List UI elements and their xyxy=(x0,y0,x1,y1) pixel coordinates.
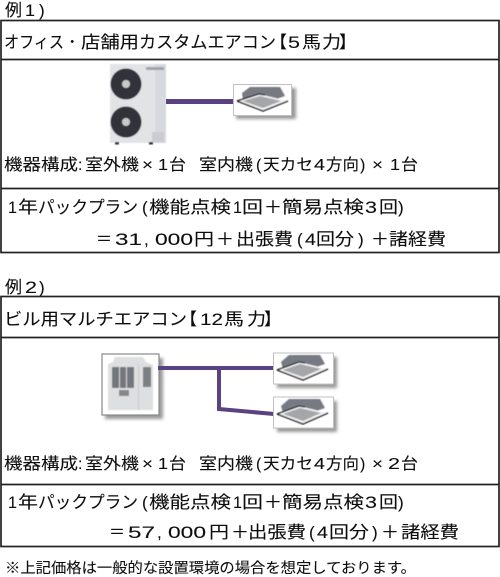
text: equipment configuration example 2: × xyxy=(142,456,153,473)
text: equipment configuration example 1: ) xyxy=(360,157,365,174)
text: equipment configuration example 2: 室外機 xyxy=(85,455,139,473)
text: price example 2: 57 xyxy=(128,523,155,542)
title: office and store custom air conditioner xyxy=(4,33,356,52)
text: equipment configuration example 2: : xyxy=(78,456,82,473)
icon: ceiling cassette indoor unit lower xyxy=(274,397,337,432)
text: price example 1 xyxy=(96,230,446,249)
title: office and store custom air conditioner: 店舗用 xyxy=(81,33,139,52)
text: equipment configuration example 2: 2 xyxy=(388,456,400,473)
text: equipment configuration example 1: 4 xyxy=(314,157,325,174)
text: equipment configuration example 2: 室内機 xyxy=(199,455,253,473)
text: one year pack plan example 2: ＋ xyxy=(264,493,282,512)
text: one year pack plan example 1: パックプラン xyxy=(38,198,138,217)
text: equipment configuration example 1: ( xyxy=(256,157,262,174)
text: one year pack plan example 1 xyxy=(8,198,404,217)
heading: example 2 xyxy=(5,278,45,297)
text: price example 1: 回分 xyxy=(316,230,354,249)
text: one year pack plan example 1: 簡易点検 xyxy=(282,198,364,217)
text: one year pack plan example 1: 3 xyxy=(365,198,377,217)
text: price example 1: 円 xyxy=(194,230,214,249)
title: office and store custom air conditioner: 】 xyxy=(339,33,356,52)
text: one year pack plan example 2: パックプラン xyxy=(38,493,138,512)
heading: example 2: ) xyxy=(39,278,45,297)
text: equipment configuration example 1: 室外機 xyxy=(85,156,139,174)
icon: ceiling cassette indoor unit upper xyxy=(274,353,337,388)
text: equipment configuration example 1: 天カセ xyxy=(263,157,313,174)
title: office and store custom air conditioner: 【 xyxy=(270,33,287,52)
title: office and store custom air conditioner: 5 xyxy=(288,33,300,52)
text: price example 1: ＝ xyxy=(96,230,112,249)
heading: example 1 xyxy=(5,1,45,20)
title: office and store custom air conditioner: 力 xyxy=(322,33,341,52)
text: price example 1: ＋ xyxy=(216,230,234,249)
text: equipment configuration example 2: 方向 xyxy=(326,455,359,473)
text: price example 1: 出張費 xyxy=(236,230,293,249)
text: equipment configuration example 2: 機器構成 xyxy=(4,455,78,473)
text: equipment configuration example 1: × xyxy=(142,157,153,174)
text: one year pack plan example 1: 機能点検 xyxy=(149,198,231,217)
text: equipment configuration example 2: ( xyxy=(256,456,262,473)
text: price example 2: ) xyxy=(372,523,378,542)
text: price example 2: 円 xyxy=(209,523,229,542)
title: building multi air conditioner: 12 xyxy=(200,310,223,329)
text: equipment configuration example 2 xyxy=(4,455,418,473)
text: equipment configuration example 1: 台 xyxy=(169,156,186,174)
text: price example 2 xyxy=(109,523,459,542)
text: one year pack plan example 1: ＋ xyxy=(264,198,282,217)
text: equipment configuration example 2: 天カセ xyxy=(263,456,313,473)
heading: example 2: 2 xyxy=(25,278,37,297)
title: building multi air conditioner: 馬 xyxy=(224,310,244,329)
text: one year pack plan example 2: 1 xyxy=(233,493,242,512)
text: equipment configuration example 2: 台 xyxy=(169,455,186,473)
title: office and store custom air conditioner: カスタムエアコン xyxy=(139,33,276,52)
text: price example 2: 回分 xyxy=(329,523,369,542)
text: price example 2: 出張費 xyxy=(248,523,306,542)
text: price example 2: 4 xyxy=(317,523,328,542)
text: price example 1: 4 xyxy=(305,230,316,249)
text: price example 2: , xyxy=(157,523,162,542)
text: price example 1: ＋ xyxy=(371,230,389,249)
text: equipment configuration example 1: 機器構成 xyxy=(4,156,78,174)
text: one year pack plan example 2: ) xyxy=(398,493,404,512)
icon: building multi outdoor unit xyxy=(102,354,163,419)
icon: ceiling cassette indoor unit xyxy=(234,84,296,119)
title: building multi air conditioner: 力 xyxy=(247,310,266,329)
text: equipment configuration example 2: × xyxy=(372,456,383,473)
text: price example 1: 000 xyxy=(155,230,193,249)
text: one year pack plan example 2: 年 xyxy=(18,493,38,512)
heading: example 1: 例 xyxy=(5,1,22,20)
title: office and store custom air conditioner: 馬 xyxy=(302,33,321,52)
text: price example 2: ( xyxy=(309,523,315,542)
text: equipment configuration example 1: 方向 xyxy=(326,156,359,174)
text: price example 1: 諸経費 xyxy=(389,230,446,249)
text: one year pack plan example 2: 回 xyxy=(379,493,398,512)
text: one year pack plan example 2: 1 xyxy=(8,493,17,512)
connector: branching refrigerant pipes xyxy=(158,368,274,414)
panel: example 1 table xyxy=(1,20,499,252)
title: office and store custom air conditioner: オフィス xyxy=(4,33,64,52)
text: one year pack plan example 1: 1 xyxy=(8,198,17,217)
text: one year pack plan example 2: 簡易点検 xyxy=(282,493,364,512)
text: price example 2: ＝ xyxy=(109,523,125,542)
text: price example 1: , xyxy=(144,230,149,249)
text: one year pack plan example 1: 回 xyxy=(379,198,398,217)
icon: outdoor unit with two fans xyxy=(110,64,166,144)
text: one year pack plan example 1: ) xyxy=(398,198,404,217)
text: price example 2: 000 xyxy=(168,523,206,542)
text: equipment configuration example 1: 1 xyxy=(158,157,168,174)
text: one year pack plan example 1: 回 xyxy=(242,198,263,217)
text: one year pack plan example 2: 3 xyxy=(365,493,377,512)
text: equipment configuration example 1: × xyxy=(372,157,383,174)
panel: example 2 table xyxy=(1,296,499,546)
text: equipment configuration example 1: : xyxy=(78,157,82,174)
text: one year pack plan example 1: 年 xyxy=(18,198,38,217)
footnote: ※上記価格は一般的な設置環境の場合を想定しております。 xyxy=(5,560,416,577)
title: building multi air conditioner xyxy=(4,310,281,329)
text: equipment configuration example 2: 4 xyxy=(314,456,325,473)
text: equipment configuration example 1: 台 xyxy=(401,156,418,174)
heading: example 1: ) xyxy=(39,1,45,20)
text: equipment configuration example 1 xyxy=(4,156,418,174)
text: equipment configuration example 2: 1 xyxy=(158,456,168,473)
title: building multi air conditioner: ビル用マルチエアコン xyxy=(4,310,187,329)
text: equipment configuration example 1: 室内機 xyxy=(199,156,253,174)
connector: refrigerant pipe xyxy=(166,99,234,104)
text: equipment configuration example 2: 台 xyxy=(401,455,418,473)
text: one year pack plan example 2 xyxy=(8,493,404,512)
title: office and store custom air conditioner: ･ xyxy=(68,33,76,52)
text: price example 1: ) xyxy=(358,230,364,249)
text: equipment configuration example 1: 1 xyxy=(390,157,400,174)
text: one year pack plan example 1: 1 xyxy=(233,198,242,217)
text: one year pack plan example 2: 機能点検 xyxy=(149,493,231,512)
title: building multi air conditioner: 【 xyxy=(180,310,197,329)
heading: example 2: 例 xyxy=(5,278,22,297)
text: price example 2: ＋ xyxy=(231,523,249,542)
text: one year pack plan example 1: ( xyxy=(142,198,148,217)
text: price example 2: ＋ xyxy=(381,523,399,542)
title: building multi air conditioner: 】 xyxy=(264,310,281,329)
text: one year pack plan example 2: ( xyxy=(142,493,148,512)
heading: example 1: 1 xyxy=(25,1,35,20)
text: price example 2: 諸経費 xyxy=(401,523,459,542)
text: equipment configuration example 2: ) xyxy=(360,456,365,473)
text: price example 1: 31 xyxy=(115,230,142,249)
text: one year pack plan example 2: 回 xyxy=(242,493,263,512)
text: price example 1: ( xyxy=(297,230,303,249)
